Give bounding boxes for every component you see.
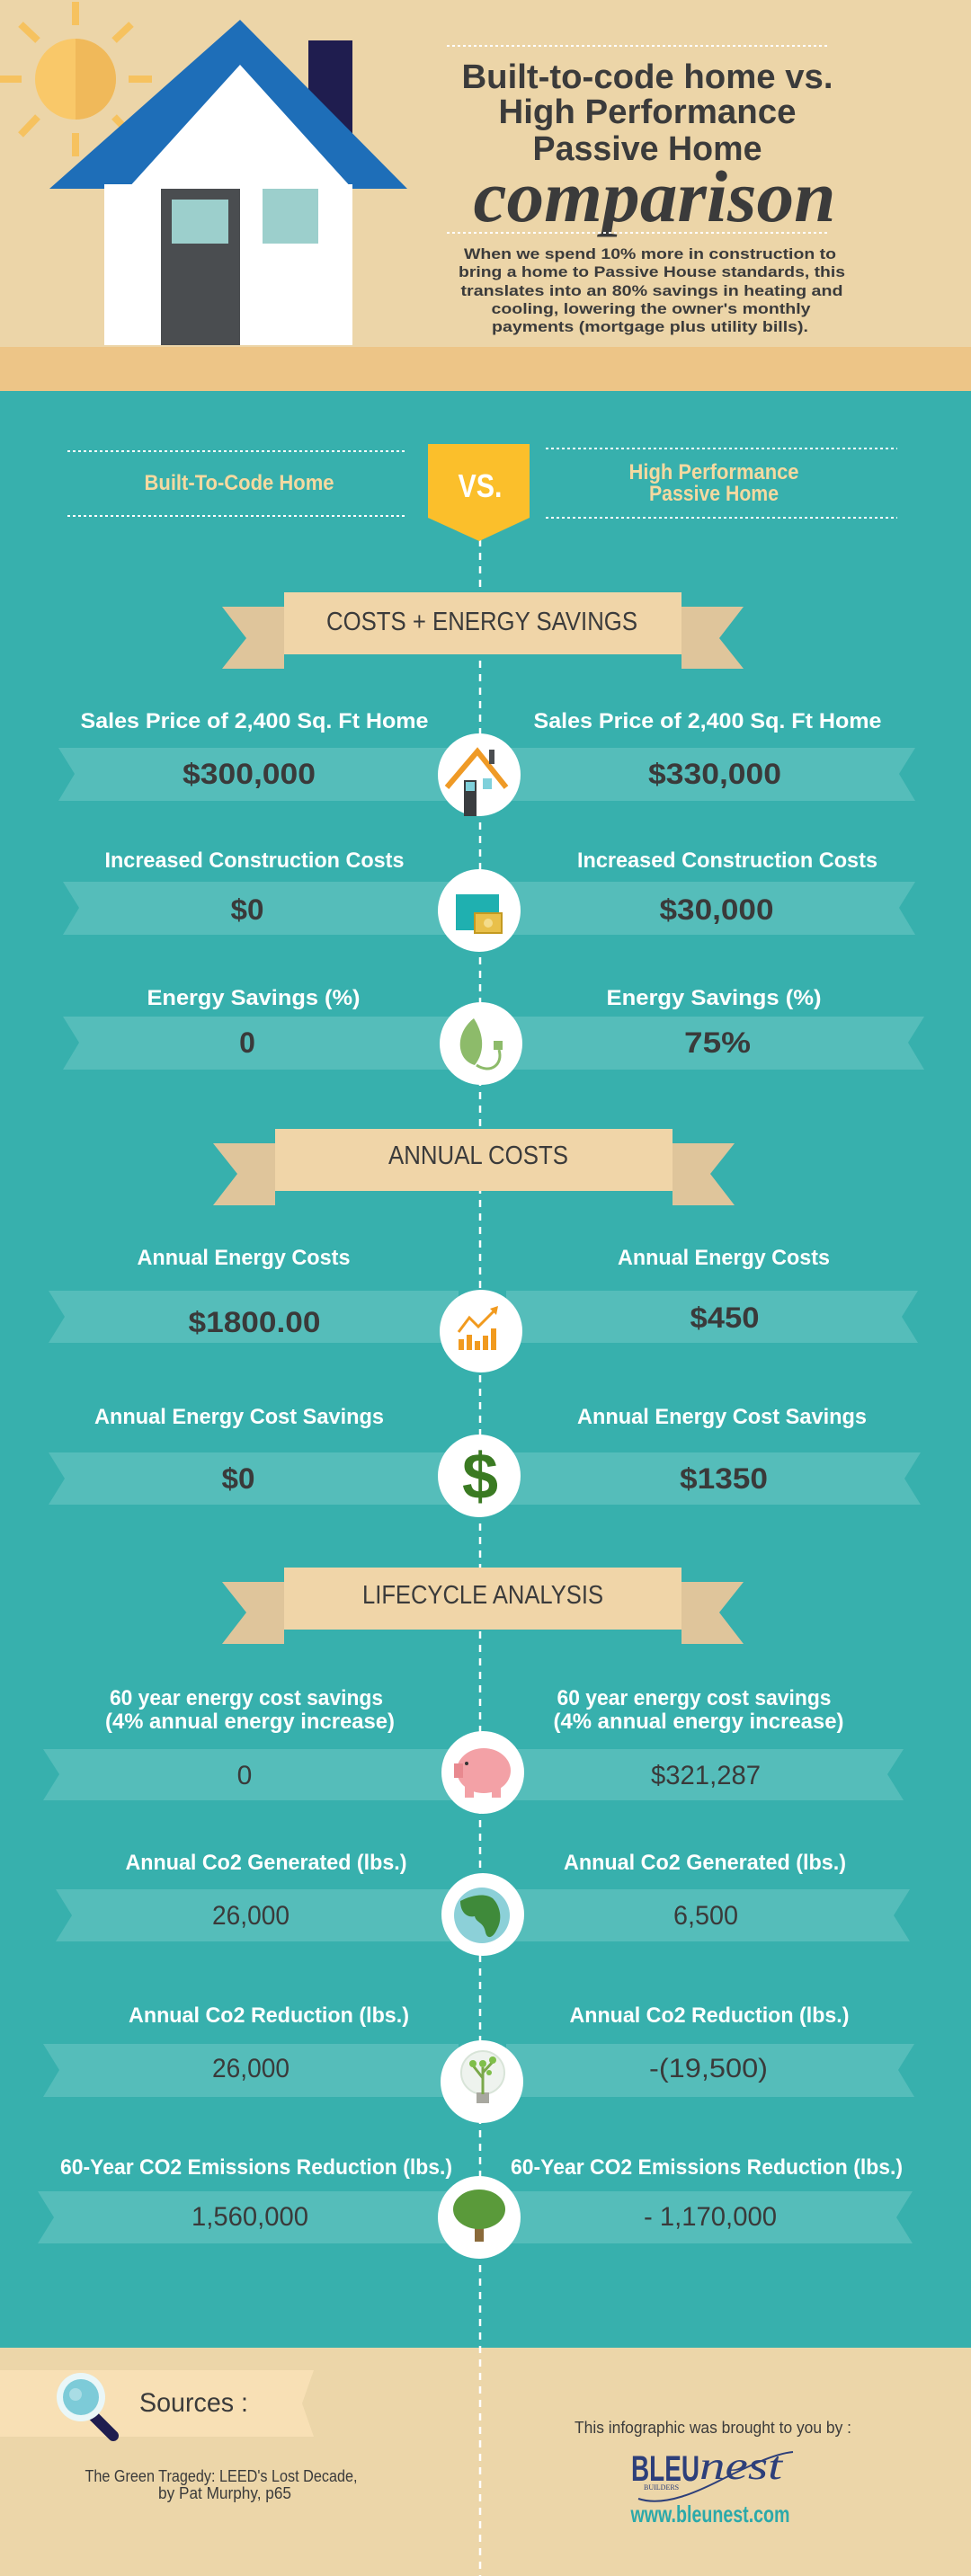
icon: magnifier: [57, 2373, 113, 2436]
logo: bleunest builders: BLEU: [631, 2449, 699, 2489]
sources ribbon: [0, 2370, 314, 2437]
banner: annual costs: ANNUAL COSTS: [388, 1141, 568, 1170]
row: energy savings: 0: [239, 1026, 255, 1059]
row: annual co2 generated: [56, 1851, 910, 1956]
row: annual energy costs: [49, 1246, 918, 1372]
row: sales price: [58, 709, 915, 816]
row: sales price: Sales Price of 2,400 Sq. Ft Home: [534, 709, 881, 733]
row: construction costs: $0: [230, 893, 264, 926]
icon: house: [438, 733, 521, 816]
title block: comparison: [473, 155, 836, 237]
banner: lifecycle analysis: LIFECYCLE ANALYSIS: [362, 1581, 603, 1610]
source citation: by Pat Murphy, p65: [158, 2484, 291, 2502]
icon: safe with money: [438, 869, 521, 952]
row: energy savings: 75%: [684, 1026, 751, 1059]
row: annual co2 reduction: -(19,500): [649, 2054, 768, 2083]
sources ribbon: Sources :: [139, 2388, 248, 2418]
row: annual co2 generated: 26,000: [212, 1901, 290, 1931]
row: annual co2 reduction: [43, 2003, 914, 2123]
row: annual energy costs: Annual Energy Costs: [137, 1246, 351, 1270]
icon: dollar: $: [462, 1441, 498, 1513]
row: sales price: $300,000: [183, 758, 316, 790]
logo: bleunest builders: [631, 2444, 793, 2501]
intro paragraph: bring a home to Passive House standards, this: [459, 263, 845, 280]
row: annual energy costs: $450: [690, 1301, 759, 1334]
row: 60 year energy savings: [43, 1686, 904, 1814]
row: 60 year energy savings: (4% annual energy increase): [105, 1710, 395, 1734]
banner: costs + energy savings: COSTS + ENERGY SAVINGS: [326, 608, 637, 636]
icon: piggy bank: [441, 1731, 524, 1814]
vs badge: VS.: [459, 467, 502, 504]
title block: High Performance: [498, 93, 797, 131]
intro paragraph: payments (mortgage plus utility bills).: [492, 318, 808, 335]
background header: [0, 0, 971, 347]
icon: dollar: [438, 1435, 521, 1517]
intro paragraph: [459, 245, 845, 335]
title block: [447, 46, 836, 237]
intro paragraph: When we spend 10% more in construction to: [464, 245, 836, 262]
icon: globe: [441, 1873, 524, 1956]
row: 60 year energy savings: 60 year energy cost savings: [110, 1686, 383, 1710]
title block: Passive Home: [532, 130, 762, 168]
row: energy savings: Energy Savings (%): [147, 986, 360, 1010]
row: construction costs: Increased Construction Costs: [104, 848, 405, 873]
row: 60 year energy savings: 0: [237, 1761, 252, 1790]
illustration: house: [49, 20, 407, 345]
row: 60 year energy savings: 60 year energy cost savings: [557, 1686, 831, 1710]
row: annual energy costs: $1800.00: [189, 1306, 320, 1338]
row: 60-year co2 emissions reduction: 60-Year CO2 Emissions Reduction (lbs.): [511, 2155, 903, 2180]
icon: leaf plug: [440, 1002, 522, 1085]
row: annual co2 reduction: 26,000: [212, 2054, 290, 2083]
row: annual co2 reduction: Annual Co2 Reduction (lbs.): [129, 2003, 409, 2028]
row: annual energy cost savings: Annual Energy Cost Savings: [94, 1405, 384, 1429]
row: annual energy cost savings: [49, 1405, 921, 1517]
website url: www.bleunest.com: [630, 2500, 789, 2527]
icon: sun: [0, 2, 152, 156]
row: annual energy cost savings: $0: [221, 1462, 255, 1495]
row: construction costs: Increased Construction Costs: [577, 848, 877, 873]
row: annual co2 reduction: Annual Co2 Reduction (lbs.): [570, 2003, 849, 2028]
title block: Built-to-code home vs.: [462, 58, 833, 96]
row: annual energy cost savings: $1350: [680, 1462, 768, 1495]
row: 60 year energy savings: (4% annual energy increase): [554, 1710, 843, 1734]
vs header: Built-To-Code Home: [144, 471, 334, 495]
logo: bleunest builders: nest: [699, 2444, 784, 2488]
row: construction costs: $30,000: [660, 893, 773, 926]
intro paragraph: translates into an 80% savings in heating and: [460, 282, 843, 299]
row: energy savings: [63, 986, 924, 1085]
row: 60-year co2 emissions reduction: 60-Year CO2 Emissions Reduction (lbs.): [60, 2155, 452, 2180]
center dashed line: [479, 539, 481, 2576]
banner: costs + energy savings: [222, 592, 744, 669]
row: 60-year co2 emissions reduction: - 1,170,000: [644, 2202, 777, 2232]
row: 60-year co2 emissions reduction: 1,560,000: [192, 2202, 308, 2232]
row: sales price: Sales Price of 2,400 Sq. Ft Home: [81, 709, 429, 733]
icon: growth chart: [440, 1290, 522, 1372]
credit text: This infographic was brought to you by :: [575, 2419, 851, 2437]
row: annual energy costs: Annual Energy Costs: [618, 1246, 830, 1270]
intro paragraph: cooling, lowering the owner's monthly: [491, 300, 811, 317]
vs header: [67, 449, 897, 518]
row: annual co2 generated: Annual Co2 Generated (lbs.): [126, 1851, 406, 1875]
row: annual co2 generated: 6,500: [673, 1901, 738, 1931]
vs header: High Performance: [629, 460, 798, 484]
icon: tree: [438, 2176, 521, 2259]
row: 60-year co2 emissions reduction: [38, 2155, 913, 2259]
source citation: [85, 2467, 358, 2502]
banner: lifecycle analysis: [222, 1568, 744, 1644]
row: construction costs: [63, 848, 915, 952]
vs badge: [428, 444, 530, 541]
source citation: The Green Tragedy: LEED's Lost Decade,: [85, 2467, 358, 2485]
banner: annual costs: [213, 1129, 735, 1205]
row: 60 year energy savings: $321,287: [651, 1761, 761, 1790]
vs header: Passive Home: [649, 482, 779, 506]
row: annual energy cost savings: Annual Energy Cost Savings: [577, 1405, 867, 1429]
row: annual co2 generated: Annual Co2 Generated (lbs.): [564, 1851, 846, 1875]
row: sales price: $330,000: [648, 758, 781, 790]
icon: bulb tree: [441, 2040, 523, 2123]
row: energy savings: Energy Savings (%): [606, 986, 822, 1010]
logo: bleunest builders: BUILDERS: [644, 2483, 679, 2492]
